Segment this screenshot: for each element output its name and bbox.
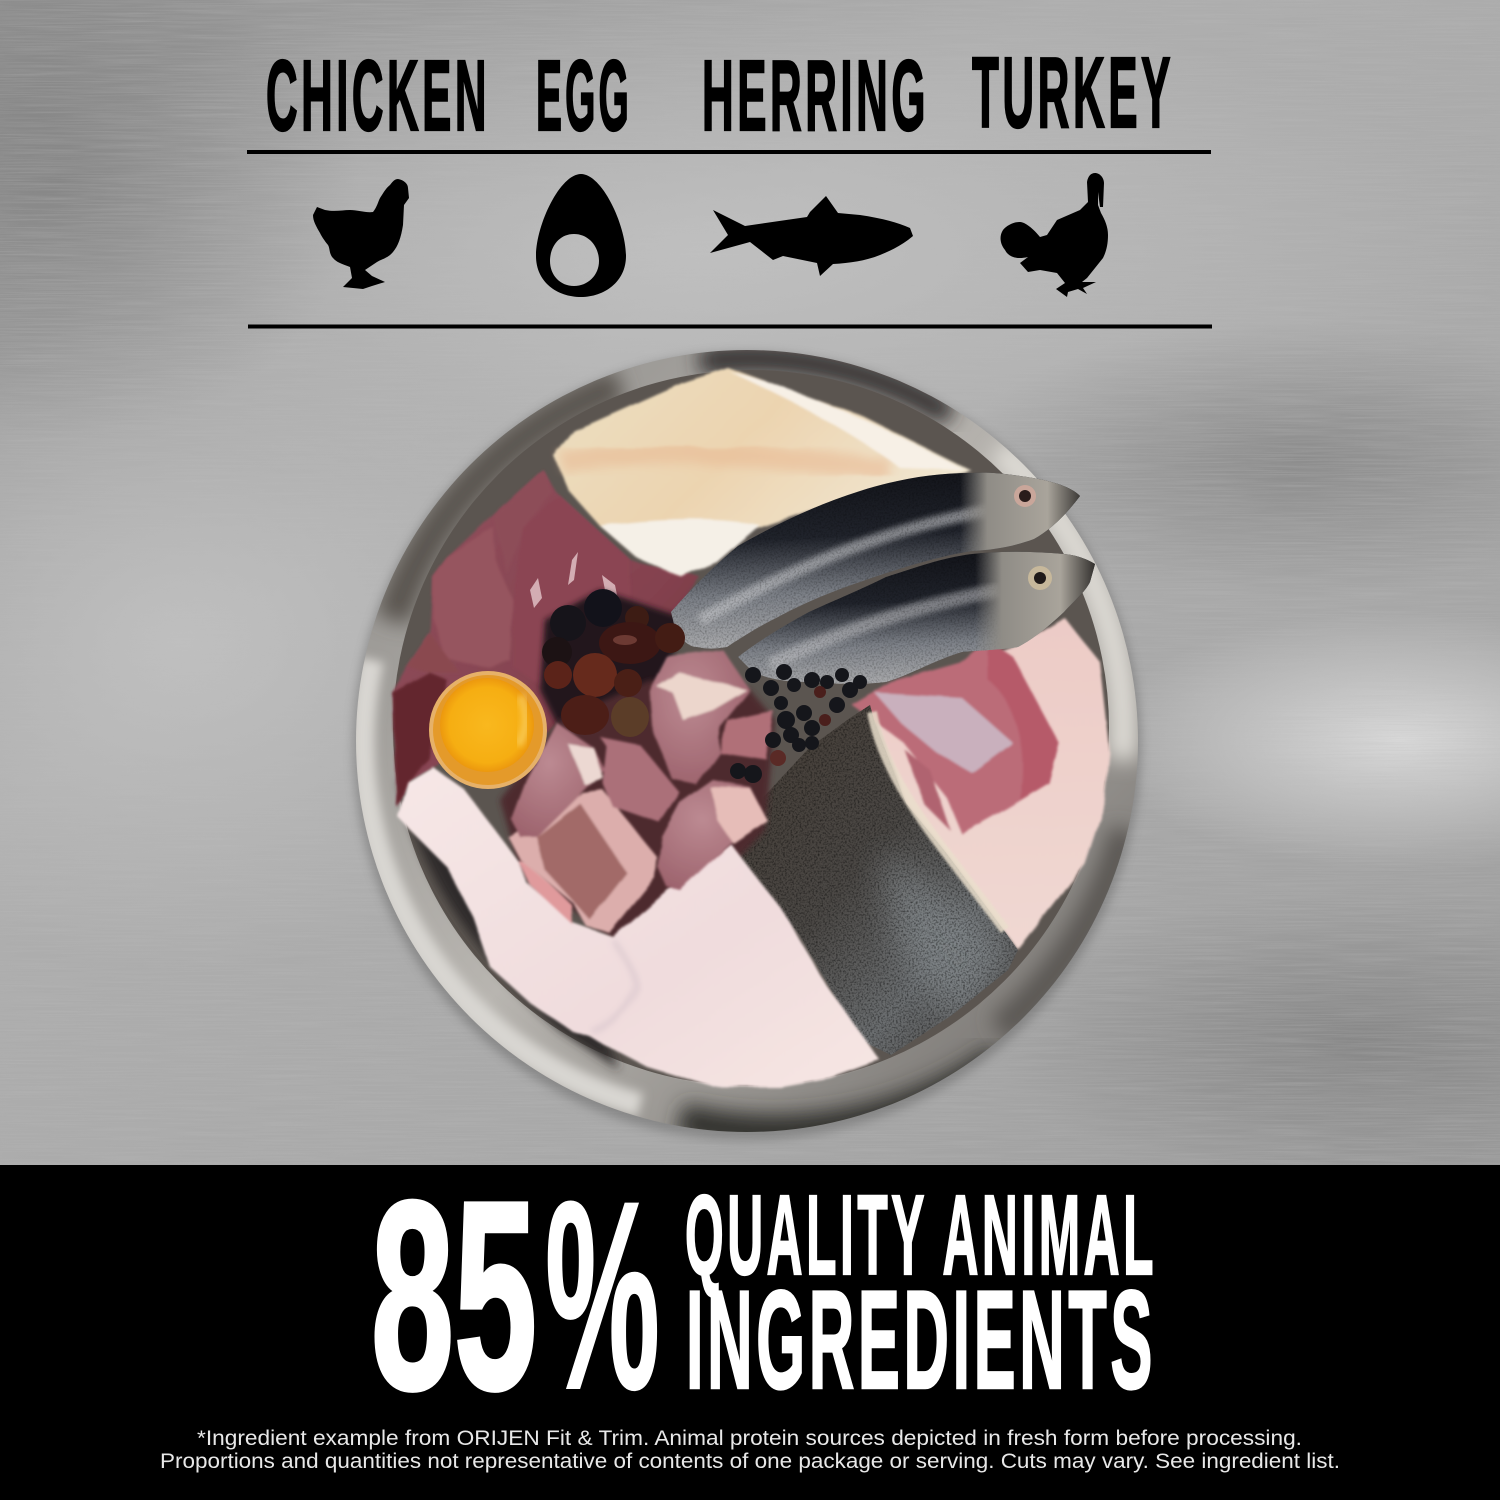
disclaimer text: *Ingredient example from ORIJEN Fit & Trim. Animal protein sources depicted in fresh form before processing. <box>197 1427 1302 1450</box>
food: chicken breast <box>870 617 1110 950</box>
ingredient headings: HERRING <box>702 40 929 152</box>
icon: chicken <box>313 179 409 289</box>
footer band <box>0 1145 1500 1500</box>
disclaimer text: Proportions and quantities not representative of contents of one package or serving. Cuts may vary. See ingredient list. <box>160 1450 1340 1473</box>
herring: front <box>738 552 1095 684</box>
food: hearts and kidneys <box>508 650 773 933</box>
ingredient headings: CHICKEN <box>266 40 490 152</box>
food: juniper berries <box>730 664 867 783</box>
food: egg yolk in shell <box>429 671 547 789</box>
icon row <box>313 173 1108 297</box>
food: dark gap under berries <box>540 590 690 740</box>
herring: back <box>671 472 1080 649</box>
footer band: % <box>545 1145 660 1445</box>
ingredient headings: EGG <box>536 40 632 152</box>
disclaimer text <box>160 1427 1340 1473</box>
bowl contents <box>393 470 700 807</box>
herring eyes <box>1014 485 1036 507</box>
headline: 85%: 85 <box>371 1145 537 1445</box>
food: liver <box>393 470 700 807</box>
icon: turkey <box>1001 173 1108 297</box>
background: brushed steel <box>0 0 1500 1190</box>
icon: herring <box>710 196 913 276</box>
icon: egg <box>536 174 626 297</box>
food: chicken leg and thigh <box>398 767 880 1087</box>
food: turkey cuts <box>852 640 1059 834</box>
food: whole herrings <box>671 472 1095 684</box>
ingredient headings <box>266 37 1174 152</box>
infographic: TURKEY <box>972 37 1174 149</box>
food: trout with skin <box>740 705 1018 1055</box>
food: white fish fillet <box>554 368 972 577</box>
steel bowl <box>353 350 1141 1140</box>
food: dried rosehips and blueberries <box>542 589 685 737</box>
food: meat base beneath hearts <box>500 680 775 945</box>
